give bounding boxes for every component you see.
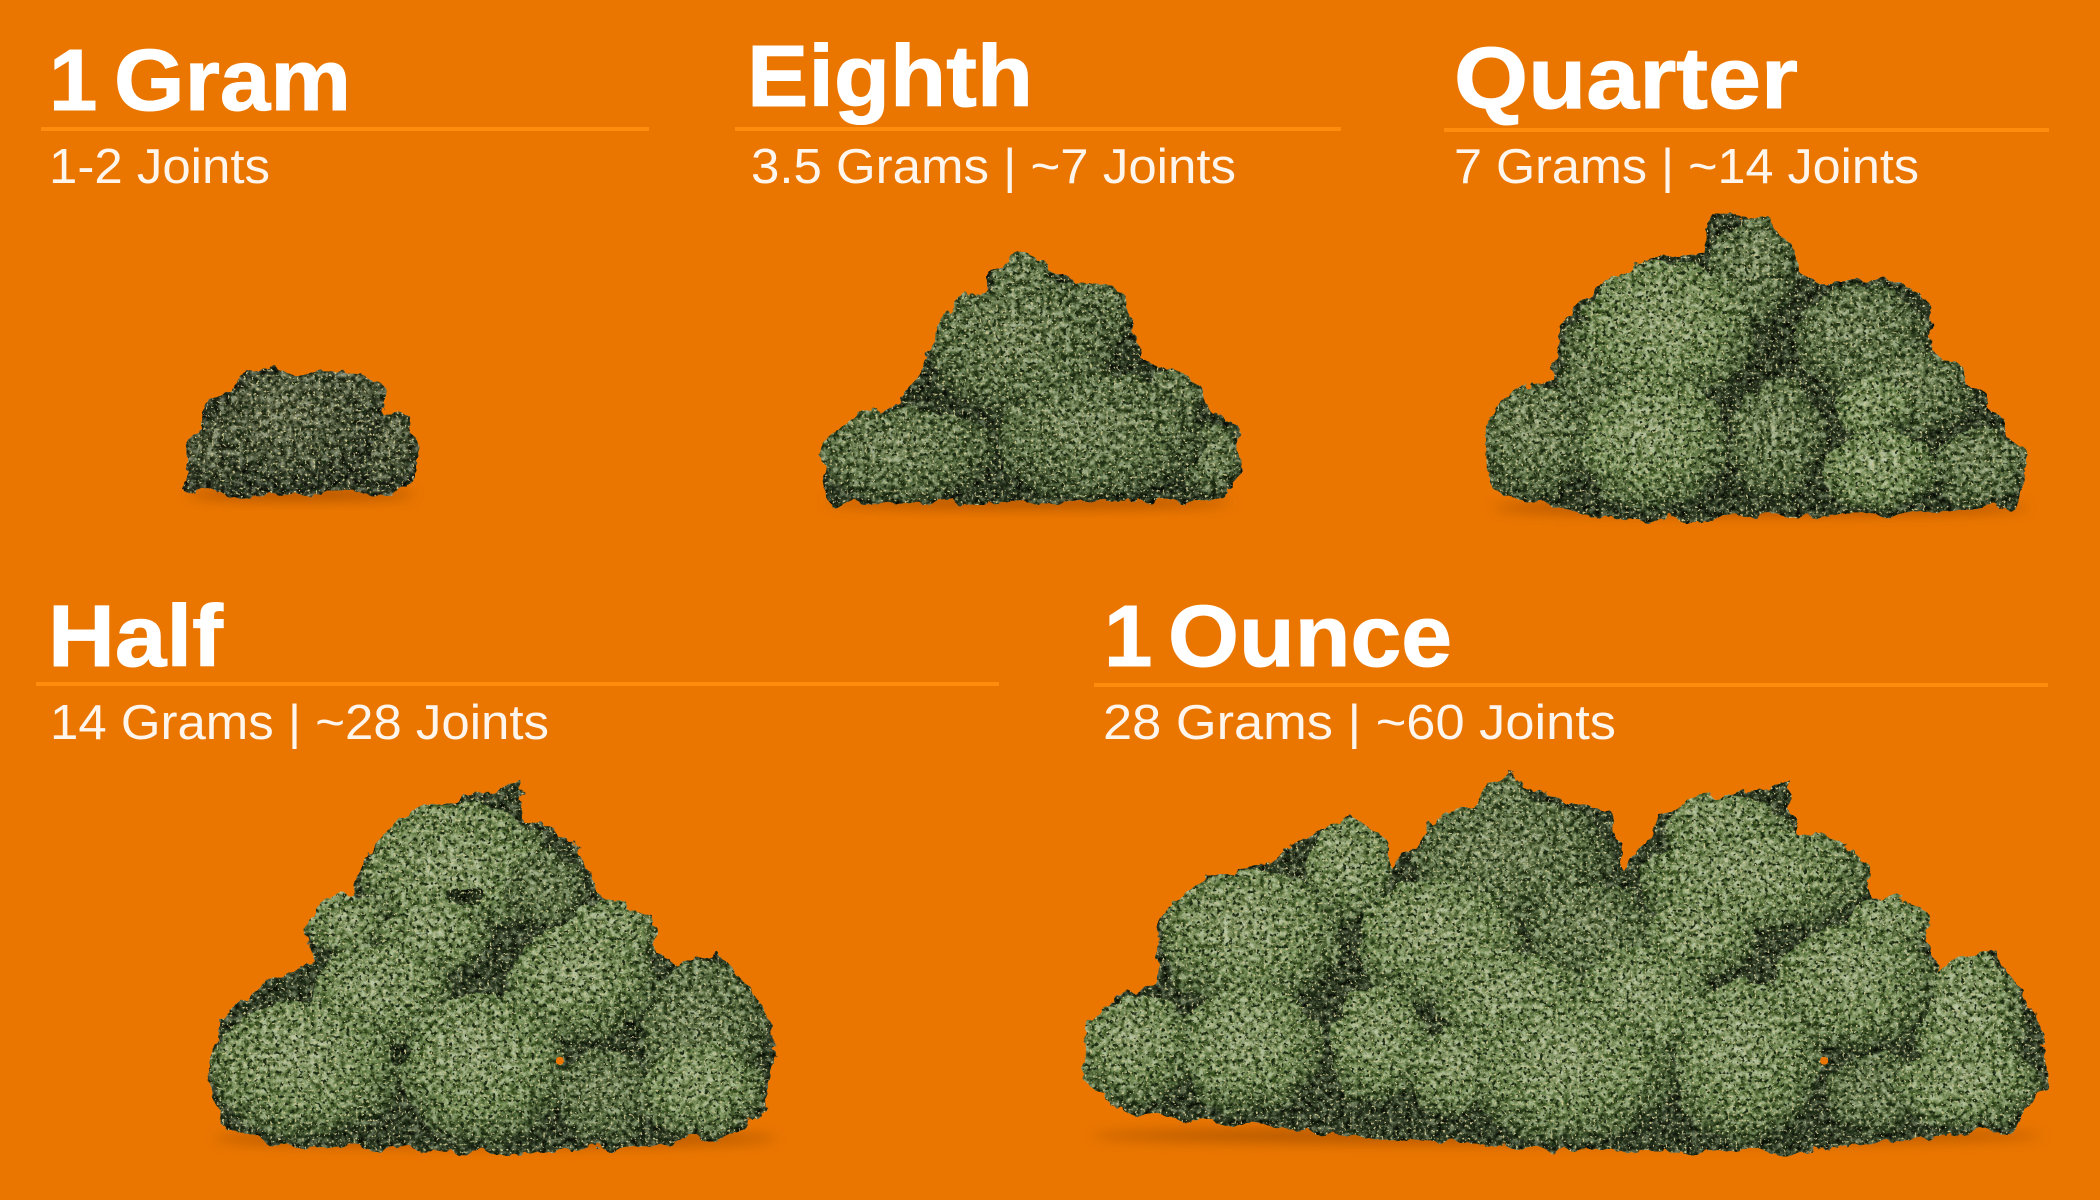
panel: half [36, 588, 999, 1152]
panel: quarter [1444, 30, 2049, 518]
heading: Half: Half [48, 588, 224, 685]
illustration: eighth pile [821, 254, 1242, 508]
heading: 1 Ounce: Ounce [1168, 588, 1452, 685]
subheading: 14 grams: 14 Grams | ~28 Joints [50, 696, 549, 750]
illustration: half pile [208, 781, 779, 1152]
panel: 1 ounce [1082, 588, 2049, 1152]
subheading: 1-2 joints: 1-2 Joints [49, 140, 270, 194]
panel: eighth [735, 28, 1341, 508]
heading: Eighth: Eighth [747, 28, 1033, 125]
panel: 1 gram [41, 32, 649, 500]
illustration: quarter pile [1484, 214, 2029, 518]
heading: 1 Ounce: 1 [1104, 588, 1177, 685]
heading: 1 Gram: 1 [49, 32, 122, 129]
subheading: 7 grams: 7 Grams | ~14 Joints [1454, 140, 1919, 194]
subheading: 3.5 grams: 3.5 Grams | ~7 Joints [751, 140, 1236, 194]
illustration: 1 gram pile [183, 366, 421, 500]
heading: Quarter: Quarter [1454, 30, 1798, 127]
subheading: 28 grams: 28 Grams | ~60 Joints [1103, 696, 1616, 750]
heading: 1 Gram: Gram [114, 32, 351, 129]
illustration: ounce pile [1082, 773, 2049, 1152]
